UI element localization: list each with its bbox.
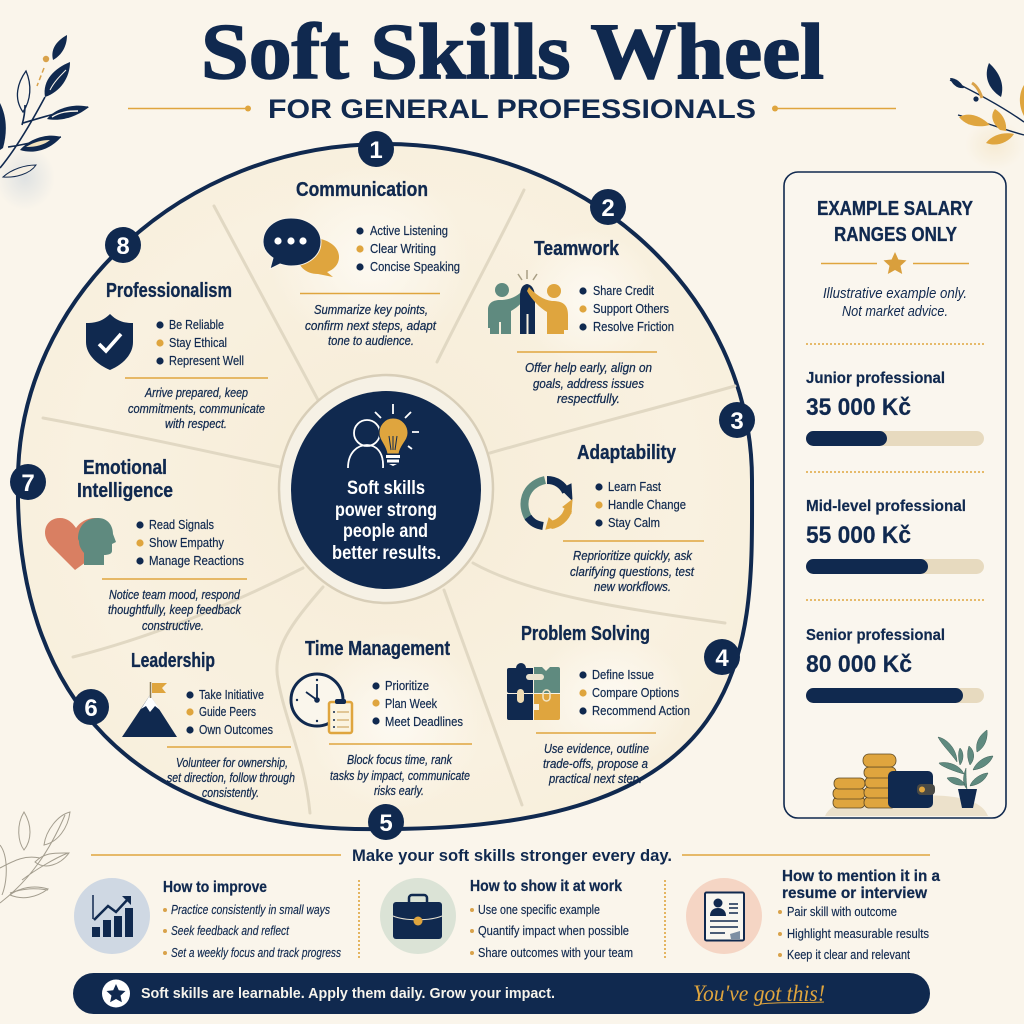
disclaimer xyxy=(823,286,967,320)
heading: How to mention it in a xyxy=(782,868,940,885)
heading xyxy=(782,868,940,902)
tip xyxy=(570,548,695,594)
tip: thoughtfully, keep feedback xyxy=(108,602,242,617)
tip: set direction, follow through xyxy=(167,770,295,785)
encouragement: You've got this! xyxy=(693,981,825,1006)
skill list: Learn Fast xyxy=(608,479,661,494)
number badges: 8 xyxy=(116,233,130,260)
icon: speech bubbles xyxy=(263,218,339,277)
heading: resume or interview xyxy=(782,885,928,902)
icon: puzzle xyxy=(507,663,560,720)
skill list: Clear Writing xyxy=(370,241,436,256)
tip: practical next step. xyxy=(548,771,642,786)
skill list xyxy=(595,479,686,530)
tip: Summarize key points, xyxy=(314,302,428,317)
decorative leaves bottom left xyxy=(0,812,70,903)
icon: clock and clipboard xyxy=(291,674,352,733)
icon: mountain with flag xyxy=(122,682,177,737)
skill list xyxy=(372,678,463,729)
number badges: 2 xyxy=(601,195,615,222)
number badges: 4 xyxy=(715,645,729,672)
number badges: 7 xyxy=(21,470,35,497)
tip: with respect. xyxy=(165,416,227,431)
footer banner xyxy=(73,973,930,1014)
skill list: Plan Week xyxy=(385,696,437,711)
tip: commitments, communicate xyxy=(128,401,265,416)
skill list: Compare Options xyxy=(592,685,679,700)
skill list: Stay Ethical xyxy=(169,335,227,350)
sector 3: adaptability: Adaptability xyxy=(577,442,677,464)
tip: Arrive prepared, keep xyxy=(144,385,248,400)
center message: power strong xyxy=(335,500,437,521)
skill list xyxy=(579,667,690,718)
icon: resume xyxy=(686,878,762,954)
salary: junior: 35 000 Kč xyxy=(806,394,911,421)
number badges xyxy=(10,131,755,840)
skill list: Active Listening xyxy=(370,223,448,238)
icon: shield xyxy=(86,314,133,370)
skill list: Define Issue xyxy=(592,667,654,682)
center message: Soft skills xyxy=(347,478,425,499)
sector 6: leadership xyxy=(122,650,295,800)
icon: coins, wallet and plant xyxy=(825,730,993,816)
wheel outline xyxy=(18,144,752,829)
center message xyxy=(332,478,441,564)
icon: team high five xyxy=(488,270,568,334)
center hub xyxy=(279,375,493,603)
list: Keep it clear and relevant xyxy=(787,948,910,962)
tip xyxy=(330,752,470,798)
icon: briefcase xyxy=(380,878,456,954)
tip: goals, address issues xyxy=(533,376,644,391)
skill list: Show Empathy xyxy=(149,535,224,550)
title: Soft Skills Wheel xyxy=(201,9,824,96)
tip: tasks by impact, communicate xyxy=(330,768,470,783)
skill list: Be Reliable xyxy=(169,317,224,332)
skill list: Prioritize xyxy=(385,678,429,693)
panel heading xyxy=(817,198,974,246)
tip: consistently. xyxy=(202,785,259,800)
salary: senior: 80 000 Kč xyxy=(806,651,912,678)
tip column: how to improve: How to improve xyxy=(163,879,267,896)
sector 1: communication xyxy=(263,179,460,348)
skill list: Resolve Friction xyxy=(593,319,674,334)
tip column: how to improve xyxy=(74,878,341,960)
sector 7: emotional intelligence xyxy=(45,457,247,633)
disclaimer: Illustrative example only. xyxy=(823,286,967,302)
list: Seek feedback and reflect xyxy=(171,924,289,938)
heading xyxy=(77,457,173,502)
list: Use one specific example xyxy=(478,903,600,917)
skill list: Support Others xyxy=(593,301,669,316)
skill list: Stay Calm xyxy=(608,515,660,530)
skills wheel xyxy=(10,131,755,840)
icon: growth chart xyxy=(74,878,150,954)
skill list xyxy=(136,517,244,568)
sector 5: time management xyxy=(291,638,472,798)
skill list xyxy=(356,223,460,274)
icon: star badge xyxy=(102,980,130,1008)
center message: people and xyxy=(343,521,428,542)
sector 6: leadership: Leadership xyxy=(131,650,215,672)
tip xyxy=(128,385,265,431)
skill list: Guide Peers xyxy=(199,704,256,719)
tip column: how to show it at work: How to show it at work xyxy=(470,878,622,895)
subtitle: FOR GENERAL PROFESSIONALS xyxy=(268,94,756,124)
skill list: Read Signals xyxy=(149,517,214,532)
list: Share outcomes with your team xyxy=(478,946,633,960)
tip xyxy=(167,755,295,800)
tip column: how to show it at work xyxy=(380,878,633,960)
disclaimer: Not market advice. xyxy=(842,304,948,320)
skill list: Recommend Action xyxy=(592,703,690,718)
salary: senior: Senior professional xyxy=(806,627,945,644)
sector 2: teamwork xyxy=(488,238,674,406)
number badges: 6 xyxy=(84,695,98,722)
sector 3: adaptability xyxy=(524,442,704,594)
sector 1: communication: Communication xyxy=(296,179,428,201)
skill list: Take Initiative xyxy=(199,687,264,702)
salary: mid-level: Mid-level professional xyxy=(806,498,966,515)
sector 4: problem solving xyxy=(507,623,690,786)
tip: clarifying questions, test xyxy=(570,564,695,579)
list: Pair skill with outcome xyxy=(787,905,897,919)
list xyxy=(778,905,929,962)
tip: constructive. xyxy=(142,618,204,633)
panel heading: RANGES ONLY xyxy=(834,224,958,246)
heading: Intelligence xyxy=(77,480,173,502)
number badges: 3 xyxy=(730,408,744,435)
panel: example salary ranges xyxy=(784,172,1006,818)
sector 5: time management: Time Management xyxy=(305,638,450,660)
tip: Reprioritize quickly, ask xyxy=(573,548,693,563)
list: Highlight measurable results xyxy=(787,927,929,941)
tip xyxy=(543,741,649,786)
tip: risks early. xyxy=(374,783,424,798)
tip: Volunteer for ownership, xyxy=(176,755,288,770)
tip: Block focus time, rank xyxy=(347,752,453,767)
tip: Use evidence, outline xyxy=(544,741,649,756)
salary: mid-level xyxy=(806,498,984,574)
heading: Emotional xyxy=(83,457,167,479)
skill list xyxy=(579,283,674,334)
sector 4: problem solving: Problem Solving xyxy=(521,623,650,645)
section heading: Make your soft skills stronger every day. xyxy=(352,846,672,865)
list xyxy=(163,903,341,960)
tip: confirm next steps, adapt xyxy=(305,318,437,333)
skill list: Share Credit xyxy=(593,283,654,298)
sector 8: professionalism: Professionalism xyxy=(106,280,232,302)
tip xyxy=(305,302,437,348)
soft highlights xyxy=(270,165,690,810)
icon: heart and head xyxy=(45,518,116,570)
skill list xyxy=(186,687,273,737)
list: Set a weekly focus and track progress xyxy=(171,946,341,960)
icon: person with light bulb xyxy=(348,404,419,468)
sector 2: teamwork: Teamwork xyxy=(534,238,620,260)
skill list xyxy=(156,317,244,368)
number badges: 5 xyxy=(379,810,393,837)
skill list: Concise Speaking xyxy=(370,259,460,274)
tip: Offer help early, align on xyxy=(525,360,652,375)
tip: new workflows. xyxy=(594,579,671,594)
center message: better results. xyxy=(332,543,441,564)
salary: junior: Junior professional xyxy=(806,370,945,387)
tip xyxy=(525,360,652,406)
sector 8: professionalism xyxy=(86,280,268,431)
salary: senior xyxy=(806,627,984,703)
tip: tone to audience. xyxy=(328,333,414,348)
subtitle xyxy=(128,94,896,124)
tip: Notice team mood, respond xyxy=(109,587,241,602)
icon: cycle arrows xyxy=(524,480,572,529)
number badges: 1 xyxy=(369,137,383,164)
sector dividers xyxy=(43,190,735,813)
list: Quantify impact when possible xyxy=(478,924,629,938)
decorative leaves top left xyxy=(0,35,89,210)
salary: junior xyxy=(806,370,984,446)
tip: respectfully. xyxy=(557,391,620,406)
list: Practice consistently in small ways xyxy=(171,903,330,917)
tip: trade-offs, propose a xyxy=(543,756,648,771)
panel heading: EXAMPLE SALARY xyxy=(817,198,974,220)
list xyxy=(470,903,633,960)
tip xyxy=(108,587,242,633)
salary: mid-level: 55 000 Kč xyxy=(806,522,911,549)
skill list: Own Outcomes xyxy=(199,722,273,737)
footer banner: Soft skills are learnable. Apply them daily. Grow your impact. xyxy=(141,985,555,1002)
icon: star divider xyxy=(821,252,969,274)
tip column: how to mention it xyxy=(686,868,940,962)
decorative leaves top right xyxy=(950,63,1024,170)
skill list: Meet Deadlines xyxy=(385,714,463,729)
skill list: Manage Reactions xyxy=(149,553,244,568)
skill list: Handle Change xyxy=(608,497,686,512)
skill list: Represent Well xyxy=(169,353,244,368)
